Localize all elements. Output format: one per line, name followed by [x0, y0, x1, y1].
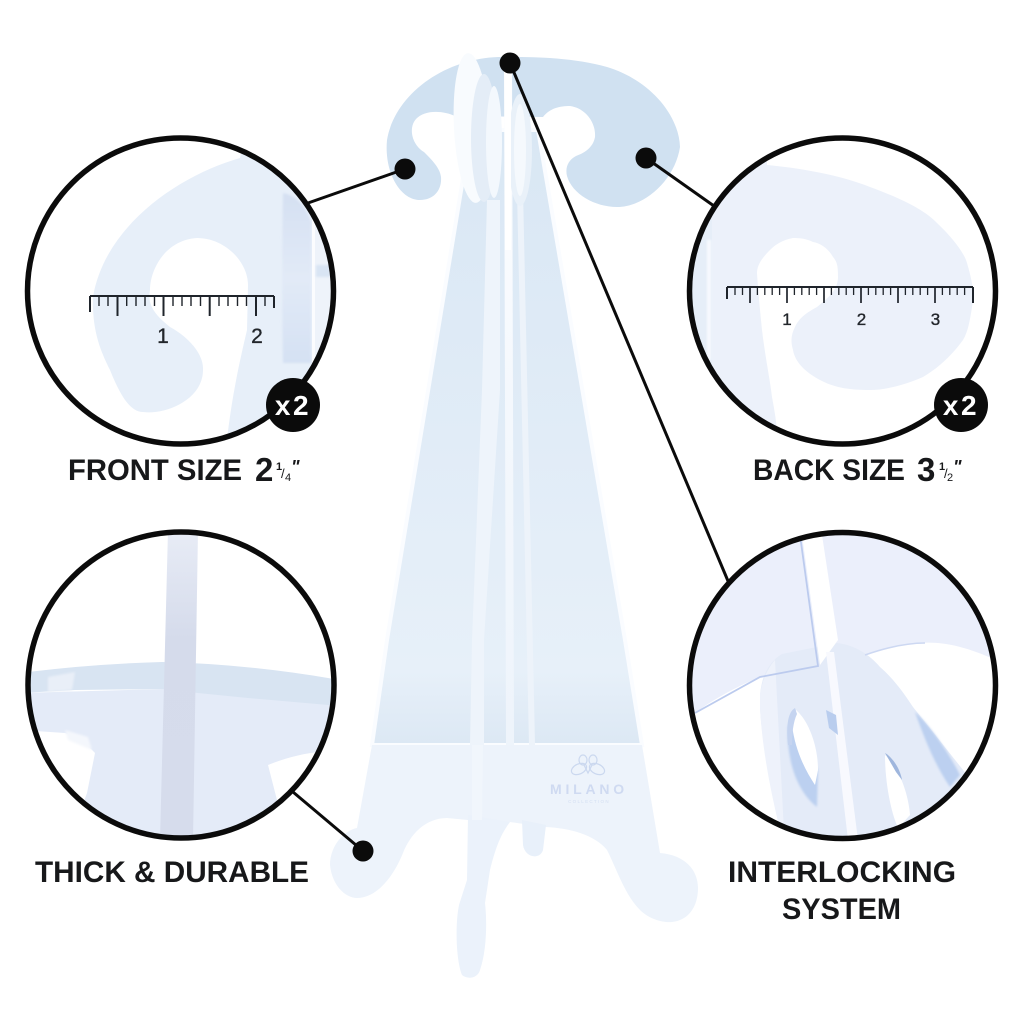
heading: front size	[68, 451, 300, 488]
panel: thick and durable	[20, 530, 345, 889]
heading: interlocking system: SYSTEM	[782, 893, 901, 926]
heading: back size: 2	[947, 472, 953, 484]
heading: back size: BACK SIZE	[753, 454, 905, 487]
heading: front size: 1	[276, 461, 282, 473]
ruler: 3 1/2 inch scale: 2	[857, 310, 866, 329]
easel lower body and feet	[330, 745, 698, 922]
ruler: 3 1/2 inch scale: 1	[782, 310, 792, 329]
ruler: 2 1/4 inch scale: 2	[251, 325, 263, 348]
heading: interlocking system	[728, 856, 956, 926]
brand watermark: MILANO	[550, 781, 628, 797]
badge: x2	[266, 378, 320, 432]
heading: back size: /	[944, 466, 948, 481]
heading: back size: 3	[917, 451, 935, 488]
back leg	[522, 820, 546, 856]
callout: thickness pointer	[293, 792, 374, 862]
lens ring	[690, 532, 996, 838]
callout: interlock pointer	[500, 52, 728, 581]
badge: x2: x2	[943, 390, 979, 421]
easel crown	[387, 57, 680, 207]
callout: back lobe pointer	[636, 148, 714, 206]
heading: back size	[753, 451, 962, 488]
heading: thick and durable: THICK & DURABLE	[35, 856, 309, 889]
brand watermark: COLLECTION	[568, 799, 610, 804]
edge thickness magnified view	[30, 534, 332, 836]
brand watermark	[550, 755, 628, 804]
interlock magnified view	[692, 535, 990, 836]
callout: front lobe pointer	[308, 158, 416, 203]
panel: front size	[28, 130, 341, 488]
badge: x2: x2	[275, 390, 311, 421]
interlocking slats	[450, 52, 535, 820]
heading: front size: 4	[285, 472, 291, 484]
ruler: 3 1/2 inch scale	[727, 287, 973, 329]
lens ring	[28, 532, 334, 838]
easel product illustration	[330, 52, 698, 978]
lens ring	[28, 138, 334, 444]
heading: back size: "	[953, 457, 962, 477]
panel: back size	[680, 130, 996, 488]
back size magnified view	[692, 161, 972, 426]
ruler: 3 1/2 inch scale: 3	[931, 310, 940, 329]
front size magnified view	[93, 154, 330, 434]
heading: front size: FRONT SIZE	[68, 454, 242, 487]
badge: x2	[934, 378, 988, 432]
lens ring	[690, 138, 996, 444]
heading: front size: "	[291, 457, 300, 477]
heading: front size: 2	[255, 451, 273, 488]
easel body	[372, 130, 642, 745]
panel: interlocking system	[680, 525, 1000, 926]
center leg	[457, 815, 510, 978]
ruler: 2 1/4 inch scale: 1	[157, 325, 169, 348]
heading: back size: 1	[939, 461, 945, 473]
heading: front size: /	[281, 466, 285, 481]
heading: interlocking system: INTERLOCKING	[728, 856, 956, 889]
ruler: 2 1/4 inch scale	[90, 296, 274, 348]
